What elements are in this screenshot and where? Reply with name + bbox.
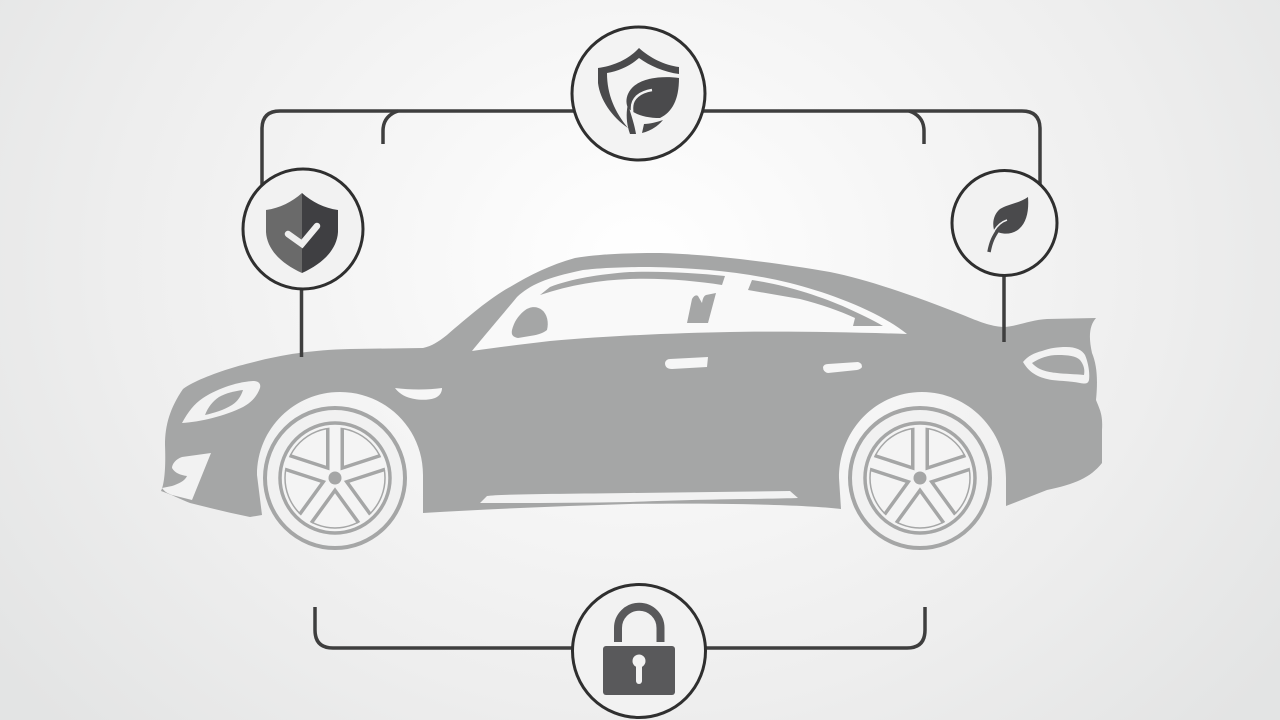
right callout stem: [1002, 274, 1006, 342]
top connector frame: [262, 111, 1040, 186]
icon: leaf: [952, 170, 1057, 276]
car body: [161, 253, 1102, 517]
roof strip in window: [540, 272, 725, 295]
rear window strip: [748, 280, 883, 326]
side windows: [472, 267, 907, 351]
front door handle: [665, 357, 708, 369]
fender vent: [395, 388, 442, 400]
icon: shield with check: [243, 169, 363, 289]
left callout stem: [300, 288, 303, 357]
bottom connector bracket: [315, 607, 925, 648]
rear wheel: [850, 408, 990, 548]
side sill highlight: [480, 491, 798, 503]
tail light: [1023, 347, 1089, 384]
side mirror: [512, 307, 548, 338]
icon: shield with leaf: [572, 27, 705, 160]
tail light inner: [1032, 355, 1084, 375]
icon: padlock: [572, 584, 706, 718]
headlight inner: [205, 390, 243, 415]
car silhouette: [161, 253, 1102, 517]
headlight: [182, 381, 260, 423]
rear door handle: [823, 362, 862, 373]
seat headrest shape: [687, 293, 716, 323]
front wheel: [265, 408, 405, 548]
front bumper intake: [162, 453, 211, 500]
